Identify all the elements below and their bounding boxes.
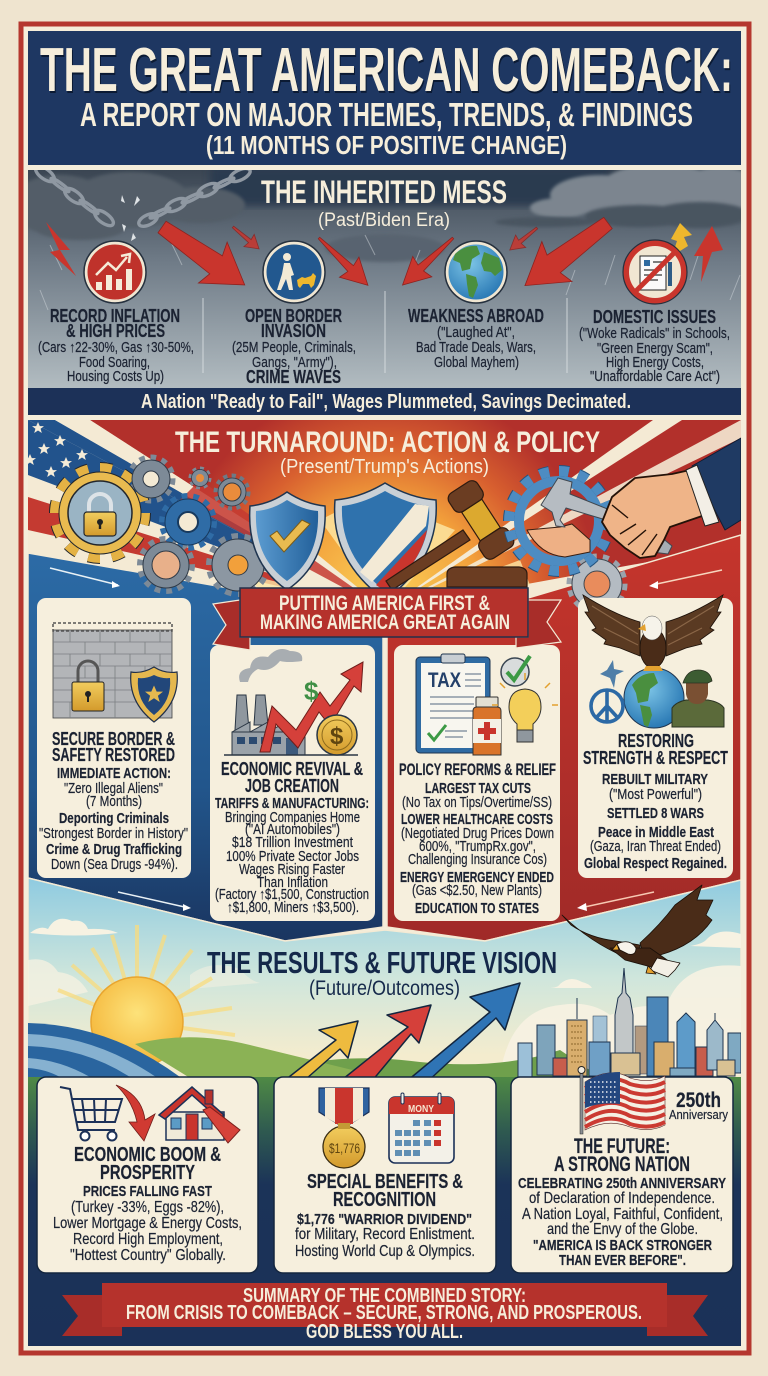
card: economic revival: ECONOMIC REVIVAL & <box>221 759 363 779</box>
column: domestic issues: DOMESTIC ISSUES <box>593 307 716 327</box>
card: economic revival: Than Inflation <box>257 875 328 891</box>
card: economic revival: ("AI Automobiles") <box>245 822 340 838</box>
card: secure border: IMMEDIATE ACTION: <box>57 765 171 782</box>
card: secure border: "Strongest Border in History" <box>39 826 188 842</box>
heading: THE TURNAROUND: ACTION & POLICY <box>175 426 600 459</box>
card: restoring strength: RESTORING <box>618 731 694 751</box>
card: policy reforms: 600%, "TrumpRx.gov", <box>419 839 536 855</box>
clouds <box>28 919 741 1075</box>
column: domestic issues: "Unaffordable Care Act") <box>590 369 720 385</box>
anniversary label: Anniversary <box>669 1108 729 1122</box>
hills <box>28 1023 600 1078</box>
card: economic revival: JOB CREATION <box>245 776 339 796</box>
card: economic revival: $18 Trillion Investment <box>232 835 353 851</box>
icon: factory, rising arrow and coin: $ <box>330 723 344 750</box>
flag stars <box>24 422 88 477</box>
footer: summary ribbon: SUMMARY OF THE COMBINED STORY: <box>243 1285 526 1307</box>
column: weakness abroad: ("Laughed At", <box>437 325 515 341</box>
sunburst background <box>28 420 741 588</box>
card: secure border: (7 Months) <box>86 794 142 810</box>
card: secure border: Crime & Drug Trafficking <box>46 842 182 858</box>
card: economic revival: TARIFFS & MANUFACTURING: <box>215 795 369 812</box>
card: the future: "AMERICA IS BACK STRONGER <box>533 1237 712 1254</box>
card: policy reforms: LARGEST TAX CUTS <box>425 780 531 797</box>
column: domestic issues: High Energy Costs, <box>606 355 704 371</box>
card: policy reforms: ENERGY EMERGENCY ENDED <box>400 869 554 886</box>
card: the future <box>511 1066 733 1273</box>
column: weakness abroad: Global Mayhem) <box>434 355 519 371</box>
card: special benefits <box>274 1077 496 1273</box>
storm clouds <box>10 164 765 310</box>
card: restoring strength <box>578 595 733 878</box>
icon: factory, rising arrow and coin <box>224 649 363 755</box>
icon: american flag <box>578 1066 665 1134</box>
card: secure border: "Zero Illegal Aliens" <box>64 781 163 797</box>
icon: wall, lock and badge <box>53 623 177 722</box>
card: economic revival: Bringing Companies Home <box>225 810 360 826</box>
suit sleeve <box>692 438 741 530</box>
card: policy reforms: (Negotiated Drug Prices Down <box>401 826 554 842</box>
icon: medal: $1,776 <box>329 1140 360 1156</box>
column: open border: Gangs, "Army"), <box>252 355 337 371</box>
panel: the inherited mess <box>10 163 765 388</box>
column: record inflation <box>38 306 194 385</box>
card: secure border: SAFETY RESTORED <box>52 745 175 765</box>
icon: small gear behind banner <box>570 557 624 611</box>
small direction arrows <box>50 568 722 911</box>
column: open border: INVASION <box>261 321 326 341</box>
icon: tax form, medicine and bulb <box>416 654 558 755</box>
column: domestic issues: "Green Energy Scam", <box>597 341 713 357</box>
column: weakness abroad: Bad Trade Deals, Wars, <box>416 340 536 356</box>
era label: (Future/Outcomes) <box>309 977 460 1000</box>
icon: hand turning gear with wrench <box>509 438 741 571</box>
icon: medal <box>319 1088 369 1168</box>
column: record inflation: RECORD INFLATION <box>50 306 180 326</box>
icon: shield with check <box>250 492 325 590</box>
icon: banned document <box>623 240 687 304</box>
card: restoring strength: Peace in Middle East <box>598 825 714 841</box>
heading: THE INHERITED MESS <box>261 174 507 210</box>
column: open border: OPEN BORDER <box>245 306 342 326</box>
column: weakness abroad <box>408 306 544 371</box>
card: secure border <box>37 598 191 878</box>
card: the future: of Declaration of Independence. <box>529 1190 715 1207</box>
footer: summary ribbon: GOD BLESS YOU ALL. <box>306 1321 463 1343</box>
icon: cart, falling arrow and house <box>60 1085 240 1143</box>
card: restoring strength: (Gaza, Iran Threat Ended) <box>590 839 721 855</box>
footer: summary ribbon <box>62 1283 708 1343</box>
callout: nation bar: A Nation "Ready to Fail", Wages Plummeted, Savings Decimated. <box>141 391 631 413</box>
icon: calendar: MONY <box>408 1104 434 1115</box>
blue panel <box>28 553 383 941</box>
column: open border <box>232 306 356 387</box>
red panel <box>387 535 741 941</box>
card: the future: THAN EVER BEFORE". <box>559 1252 686 1269</box>
arrows pointing at the problems <box>148 203 623 306</box>
banner: putting america first <box>213 588 561 650</box>
banner: putting america first: PUTTING AMERICA FIRST & <box>279 592 490 615</box>
icon: calendar <box>389 1093 454 1163</box>
lower panel background <box>28 1077 741 1346</box>
banner: putting america first: MAKING AMERICA GREAT AGAIN <box>260 611 510 634</box>
column: record inflation: Food Soaring, <box>79 355 150 371</box>
card: economic boom: ECONOMIC BOOM & <box>74 1144 221 1166</box>
card: policy reforms: (No Tax on Tips/Overtime/SS) <box>402 795 552 811</box>
column: open border: (25M People, Criminals, <box>232 340 356 356</box>
card: economic boom: PROSPERITY <box>100 1162 195 1184</box>
icon: factory, rising arrow and coin: $ <box>304 676 319 706</box>
icon: eagle, globe, peace sign and soldier <box>583 595 724 728</box>
card: special benefits: RECOGNITION <box>333 1189 436 1211</box>
card: special benefits: for Military, Record Enlistment. <box>295 1226 475 1243</box>
card: restoring strength: REBUILT MILITARY <box>602 771 708 788</box>
card: restoring strength: ("Most Powerful") <box>609 787 702 803</box>
era label: (Present/Trump's Actions) <box>280 456 489 478</box>
card: restoring strength: SETTLED 8 WARS <box>607 805 704 822</box>
icon: striped shield <box>335 483 436 600</box>
icon: globe <box>445 241 507 303</box>
gears group <box>56 458 266 593</box>
anniversary label <box>669 1089 729 1122</box>
lightning bolts <box>46 222 723 282</box>
anniversary label: 250th <box>676 1089 721 1112</box>
column: record inflation: & HIGH PRICES <box>66 321 165 341</box>
heading: THE RESULTS & FUTURE VISION <box>207 945 557 980</box>
card: economic revival: 100% Private Sector Jobs <box>226 849 359 865</box>
card: special benefits: Hosting World Cup & Olympics. <box>295 1243 475 1260</box>
card: economic boom: "Hottest Country" Globally. <box>70 1247 226 1264</box>
card: economic boom: Record High Employment, <box>73 1231 223 1248</box>
card: special benefits: $1,776 "WARRIOR DIVIDEND" <box>297 1211 472 1228</box>
card: economic revival <box>210 645 375 921</box>
card: economic revival: ↑$1,800, Miners ↑$3,500). <box>227 900 359 916</box>
card: policy reforms: Challenging Insurance Cos) <box>408 852 547 868</box>
card: economic boom <box>37 1077 258 1273</box>
card: secure border: Down (Sea Drugs -94%). <box>51 857 178 873</box>
card: the future: A STRONG NATION <box>554 1153 690 1176</box>
card: economic revival: Wages Rising Faster <box>239 862 345 878</box>
period note: (11 MONTHS OF POSITIVE CHANGE) <box>206 130 567 160</box>
icon: person and dog <box>263 241 325 303</box>
card: policy reforms: POLICY REFORMS & RELIEF <box>399 760 556 779</box>
card: special benefits: SPECIAL BENEFITS & <box>307 1171 463 1193</box>
card: secure border: Deporting Criminals <box>59 811 169 827</box>
column: domestic issues <box>579 307 730 385</box>
card: policy reforms: (Gas <$2.50, New Plants) <box>412 883 542 899</box>
panel: the turnaround <box>24 420 741 941</box>
sun <box>58 925 235 1067</box>
card: economic boom: Lower Mortgage & Energy Costs, <box>53 1215 242 1232</box>
card: policy reforms: EDUCATION TO STATES <box>415 900 539 917</box>
icon: gavel <box>386 478 527 590</box>
icon: broken chain <box>33 163 252 241</box>
city skyline <box>518 968 741 1077</box>
panel: results and future vision background <box>28 878 741 1346</box>
era label: (Past/Biden Era) <box>318 210 450 231</box>
card: the future: A Nation Loyal, Faithful, Confident, <box>522 1206 723 1223</box>
card: economic revival: (Factory ↑$1,500, Construction <box>215 887 369 903</box>
card: the future: and the Envy of the Globe. <box>547 1221 698 1238</box>
column: weakness abroad: WEAKNESS ABROAD <box>408 306 544 326</box>
column: record inflation: Housing Costs Up) <box>67 369 164 385</box>
callout: nation bar <box>28 388 741 415</box>
card: policy reforms <box>394 645 560 921</box>
card: economic boom: PRICES FALLING FAST <box>83 1183 212 1200</box>
panel: header <box>28 31 741 165</box>
icon: flying eagle <box>562 885 713 977</box>
icon: tax form, medicine and bulb: TAX <box>428 669 461 692</box>
column: record inflation: (Cars ↑22-30%, Gas ↑30-50%, <box>38 340 194 356</box>
card: the future: THE FUTURE: <box>574 1135 670 1158</box>
column: open border: CRIME WAVES <box>246 367 341 387</box>
card: economic boom: (Turkey -33%, Eggs -82%), <box>71 1199 224 1216</box>
column: domestic issues: ("Woke Radicals" in Schools, <box>579 326 730 342</box>
card: policy reforms: LOWER HEALTHCARE COSTS <box>401 811 553 828</box>
growth arrows <box>289 983 520 1083</box>
card: restoring strength: Global Respect Regained. <box>584 856 727 872</box>
card: secure border: SECURE BORDER & <box>52 729 175 749</box>
icon: rising prices chart <box>84 241 146 303</box>
